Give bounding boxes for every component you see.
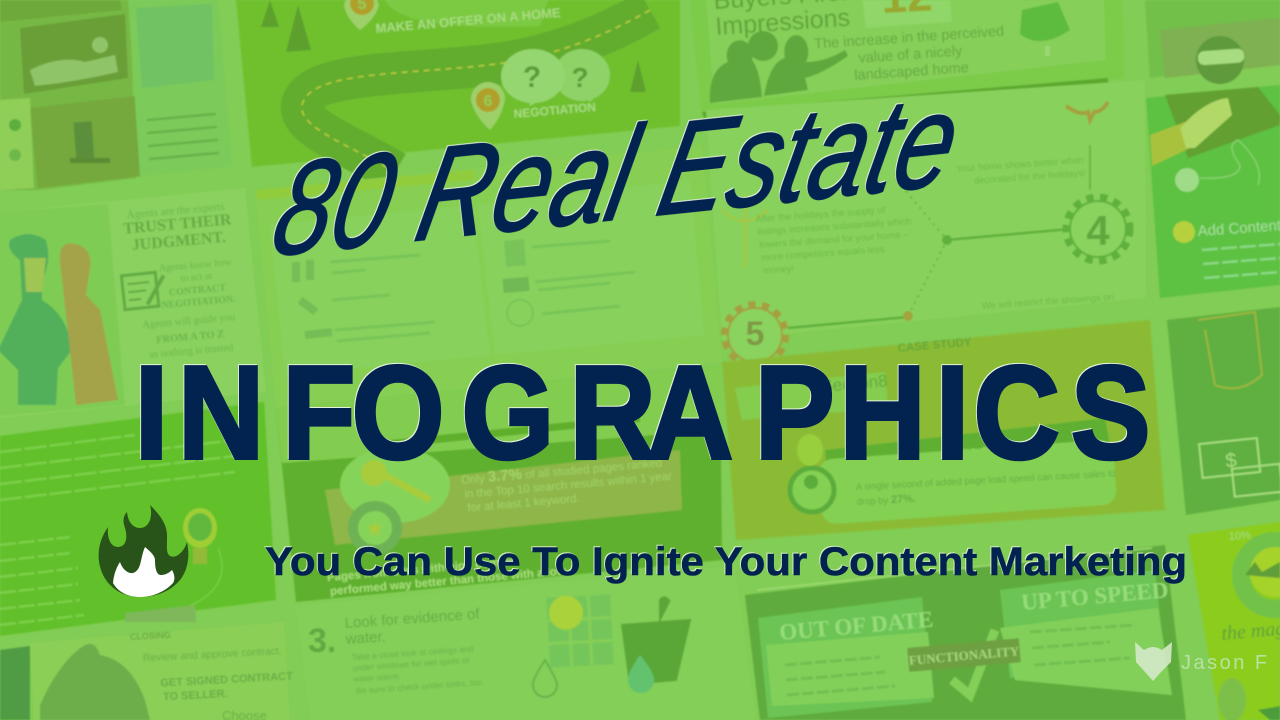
title: 80 Real Estate: 80 Real Estate — [262, 64, 972, 285]
speech bubbles: ? — [523, 61, 541, 94]
gear 4 — [1068, 199, 1128, 259]
cake illustration — [1020, 2, 1070, 41]
text: closing checklist: GET SIGNED CONTRACT — [160, 671, 293, 689]
label: interesting fact: INTERESTING FACT — [851, 443, 1001, 471]
heading: trust their judgment: TRUST THEIR — [123, 211, 232, 238]
tag: functionality: FUNCTIONALITY — [908, 643, 1020, 668]
panel: key stat tile: ★ — [365, 516, 385, 541]
number 3: 3. — [308, 622, 336, 660]
watermark text: Jason F — [1181, 652, 1270, 674]
panel: holiday timeline — [706, 80, 1146, 364]
body: check ceilings: under windows for wet spots or — [352, 655, 470, 673]
caption: landscaped home: landscaped home — [854, 60, 969, 84]
text: a to z: as nothing is trusted — [149, 342, 235, 361]
pin 5 — [344, 0, 379, 30]
wow bubble — [748, 31, 778, 61]
panel: lower left text tile — [0, 402, 276, 636]
panel: magic number donut — [1188, 522, 1280, 720]
heading: evidence of water: Look for evidence of — [344, 606, 481, 632]
trees — [261, 0, 311, 52]
icon: sink — [622, 597, 690, 684]
gear 5 — [726, 306, 784, 364]
heading: trust their judgment: JUDGMENT. — [131, 229, 227, 254]
label: negotiation: NEGOTIATION — [513, 100, 596, 121]
icon: window — [546, 593, 614, 668]
icon: water drop outline — [533, 660, 557, 697]
icon: fox head — [1135, 642, 1172, 681]
panel: road map — [236, 0, 680, 172]
icon: flame — [99, 505, 188, 597]
gear 5: 5 — [746, 315, 764, 353]
heading: up to speed: UP TO SPEED — [1020, 577, 1169, 615]
icon: lightbulb with brain — [183, 508, 217, 564]
text: pages performed: performed way better than those with a low — [330, 565, 566, 598]
text: restrict showings: We will restrict the showings on — [981, 292, 1114, 312]
stat text: Only 3.7% of all studied pages ranked — [461, 457, 663, 487]
text: a to z: FROM A TO Z — [156, 329, 225, 346]
panel: statistics column — [128, 0, 232, 176]
title: INFOGRAPHICS: INFOGRAPHICS — [135, 338, 1150, 486]
text: after the holidays: listings increases substantially which — [757, 216, 912, 238]
pin 6: 6 — [484, 93, 493, 110]
text: page load: A single second of added page load speed can cause sales to — [856, 468, 1116, 493]
panel: out of date comparison — [745, 545, 1186, 720]
text: closing checklist: Review and approve contract. — [143, 645, 282, 664]
icon: contract — [121, 271, 167, 310]
donut chart — [1228, 529, 1280, 609]
body: check ceilings: Take a close look at ceilings and — [351, 643, 474, 662]
text: decorated home: decorated for the holidays! — [974, 168, 1086, 187]
label: make an offer: MAKE AN OFFER ON A HOME — [375, 5, 561, 36]
panel: checklist tile — [255, 146, 722, 408]
gear 4: 4 — [1086, 207, 1110, 254]
text: pages performed: Pages from sites with high domain — [326, 556, 517, 584]
icon: water drop — [628, 655, 654, 693]
text: contract negotiation: Agents know how — [159, 257, 233, 274]
text: agents first line: Agents are the experts — [126, 201, 225, 221]
icon: bulb gauge — [790, 434, 834, 512]
text: after the holidays: lowers the demand for your home – — [759, 229, 910, 251]
speech bubbles: ? — [571, 62, 589, 93]
man figure — [0, 234, 72, 405]
text: after the holidays: more competitors equals less — [761, 244, 885, 264]
heading: out of date: OUT OF DATE — [778, 607, 934, 645]
text: a to z: Agents will guide you — [142, 312, 236, 331]
panel: bottom left contract tile — [0, 622, 294, 720]
bull horns icon — [1066, 102, 1108, 120]
panel: add content box — [1146, 85, 1280, 298]
panel: hand and chart text column right — [1167, 307, 1280, 515]
silhouettes — [710, 35, 848, 103]
road centre line — [302, 10, 650, 172]
body: check ceilings: Be sure to check under sinks, too. — [356, 677, 484, 696]
caption: landscaped home: value of a nicely — [858, 43, 964, 67]
text: decorated home: Your home shows better when — [956, 155, 1084, 175]
soldier figure — [40, 644, 150, 720]
icon: check mark — [952, 630, 995, 695]
donut chart: 10% — [1228, 529, 1251, 543]
text: closing checklist: TO SELLER. — [163, 688, 228, 703]
text: page load: drop by 27%. — [856, 493, 916, 508]
panel: evidence of water tile — [296, 566, 756, 720]
heading: case study: CASE STUDY — [897, 337, 972, 355]
icon: scroll — [1198, 312, 1262, 388]
icon: dollar bills — [1199, 436, 1280, 500]
panel: top right handshake — [1145, 0, 1280, 84]
caption: landscaped home: The increase in the perceived — [814, 23, 1005, 53]
heading: buyers first impressions: Impressions — [714, 4, 851, 41]
panel: family illustration — [0, 0, 142, 190]
text: closing checklist: CLOSING — [130, 630, 171, 642]
woman figure — [60, 243, 118, 405]
body: check ceilings: water stains. — [352, 671, 401, 684]
text: contract negotiation: to act at — [180, 271, 213, 284]
stat text: for at least 1 keyword. — [467, 493, 580, 515]
timeline connectors — [788, 229, 1070, 328]
speech bubbles — [501, 49, 610, 106]
text: contract negotiation: NEGOTIATION. — [161, 294, 237, 311]
pin 6 — [471, 82, 505, 130]
icon: dollar bills: $ — [1224, 449, 1238, 472]
panel: key stat tile — [276, 366, 722, 602]
text: contract negotiation: CONTRACT — [168, 282, 227, 298]
panel: case study tile — [722, 320, 1165, 540]
panel: agents trust judgment — [0, 188, 266, 418]
panel: buyers first impressions — [690, 0, 1124, 118]
text: after the holidays: money! — [763, 263, 795, 277]
yellow tree icon — [722, 195, 768, 268]
subtitle: You Can Use To Ignite Your Content Marketing — [265, 540, 1187, 584]
watermark: Jason Fox — [1135, 642, 1270, 681]
panel: case study tile: Section8 — [821, 371, 888, 396]
stat text: in the Top 10 search results within 1 year — [464, 471, 673, 501]
heading: evidence of water: water. — [344, 628, 386, 648]
winding road — [302, 10, 650, 172]
text: after the holidays: After the holidays the supply of — [755, 205, 886, 225]
